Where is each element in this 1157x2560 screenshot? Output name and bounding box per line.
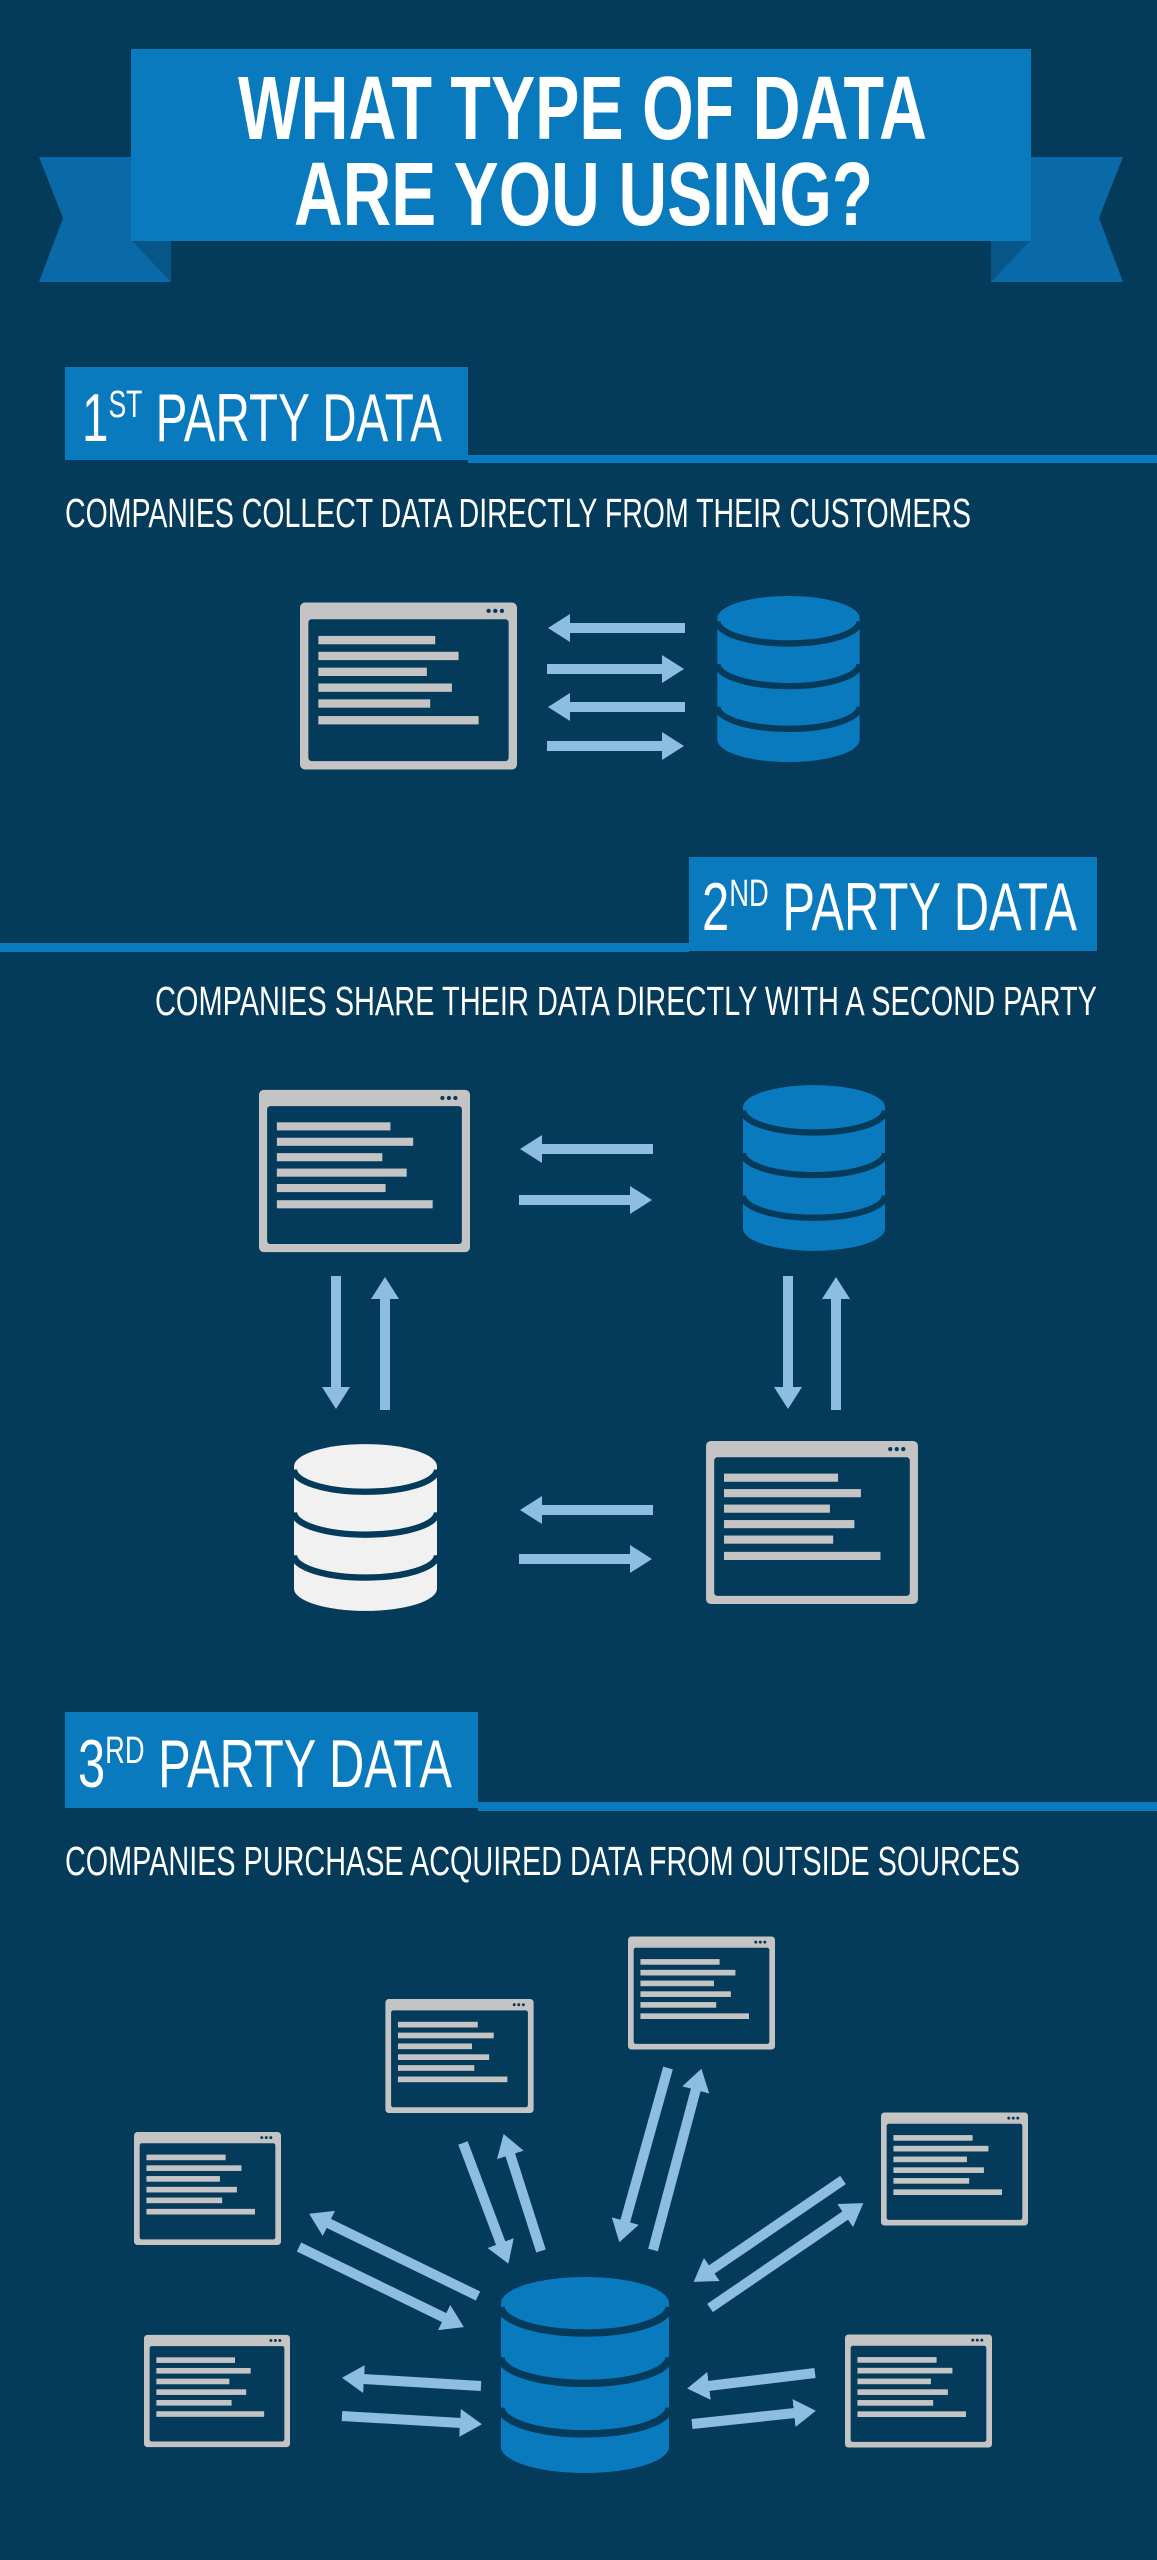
heading: 1st party data: 1 — [82, 380, 120, 456]
title banner — [39, 49, 1123, 282]
heading: 1st party data: PARTY DATA — [142, 380, 442, 456]
heading: 1st party data — [65, 367, 1157, 463]
title banner: ARE YOU USING? — [294, 145, 873, 245]
heading: 2nd party data — [0, 857, 1097, 952]
heading: 1st party data: ST — [108, 384, 142, 426]
heading: 3rd party data: 3 — [78, 1726, 116, 1802]
heading: 3rd party data — [65, 1712, 1157, 1811]
title banner: WHAT TYPE OF DATA — [238, 59, 927, 159]
heading: 2nd party data: 2 — [702, 869, 740, 945]
heading: 2nd party data: ND — [729, 873, 769, 915]
diagram: 1st party — [300, 596, 860, 769]
heading: 3rd party data: RD — [105, 1730, 145, 1772]
diagram: 2nd party — [259, 1085, 918, 1611]
heading: 3rd party data: PARTY DATA — [145, 1726, 452, 1802]
diagram: 3rd party — [134, 1936, 1028, 2473]
